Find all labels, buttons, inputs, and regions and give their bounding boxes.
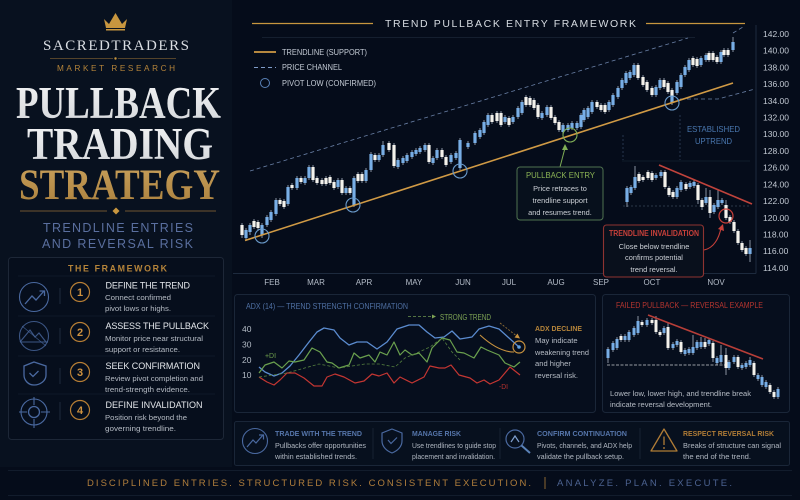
icon: trend circle (242, 428, 268, 454)
title: PULLBACK (16, 78, 221, 128)
price axis labels: 128.00 (763, 146, 789, 156)
ADX decline note: reversal risk. (535, 371, 578, 380)
month axis labels: MAY (406, 278, 423, 287)
ADX decline marker (480, 323, 525, 353)
ADX decline note: and higher (535, 359, 571, 368)
failed pullback heading: FAILED PULLBACK — REVERSAL EXAMPLE (616, 301, 763, 310)
legend: PIVOT LOW (CONFIRMED) (282, 79, 376, 88)
price axis labels: 132.00 (763, 112, 789, 122)
framework heading: THE FRAMEWORK (68, 264, 168, 274)
pivot markers (255, 96, 679, 243)
takeaway: manage risk: MANAGE RISK (412, 429, 461, 438)
ADX decline note (534, 324, 589, 380)
takeaway: respect reversal risk: the end of the trend. (683, 452, 751, 461)
chart title: TREND PULLBACK ENTRY FRAMEWORK (385, 18, 636, 30)
callout: trendline invalidation: Close below trendline (619, 242, 689, 251)
price axis labels: 138.00 (763, 62, 789, 72)
month axis labels: AUG (547, 278, 565, 287)
icon: pullback mountain (20, 322, 48, 350)
takeaway: manage risk: placement and invalidation. (412, 452, 495, 461)
month axis labels: FEB (264, 278, 280, 287)
step 4 (70, 400, 202, 433)
price axis labels (763, 29, 789, 273)
price axis labels: 118.00 (763, 230, 789, 240)
strong trend label: STRONG TREND (440, 313, 491, 322)
price axis labels: 130.00 (763, 129, 789, 139)
panel: main chart (233, 18, 789, 287)
callout: pullback entry: and resumes trend. (528, 208, 592, 217)
ADX decline note: weakening trend (534, 348, 589, 357)
brand header (43, 13, 189, 73)
footer banner: DISCIPLINED ENTRIES. STRUCTURED RISK. CONSISTENT EXECUTION. (87, 478, 531, 489)
step 1: pivot lows or highs. (105, 304, 171, 313)
panel: failed pullback (602, 294, 790, 412)
icon: crown (104, 13, 127, 30)
step 4: governing trendline. (105, 424, 176, 433)
step 2: ASSESS THE PULLBACK (106, 321, 209, 331)
takeaway: confirm continuation (506, 429, 632, 461)
subtitle (42, 221, 194, 251)
callout: trendline invalidation: TRENDLINE INVALIDATION (609, 229, 699, 238)
takeaway: respect reversal risk: Breaks of structure can signal (683, 441, 781, 450)
icon: trend up (20, 282, 48, 312)
strong trend label (408, 313, 491, 322)
legend: PRICE CHANNEL (282, 63, 343, 72)
icon: target (19, 397, 50, 428)
failed pullback note: indicate reversal development. (610, 400, 712, 409)
label: established uptrend: UPTREND (695, 136, 732, 146)
step 3: 3 (77, 367, 83, 379)
candlesticks: breakdown inset (627, 166, 750, 262)
support dashed line (607, 364, 725, 366)
price axis labels: 114.00 (763, 263, 789, 273)
month axis labels: JUL (502, 278, 517, 287)
takeaway: trade with the trend: Pullbacks offer opportunities (275, 441, 366, 450)
ADX line (259, 325, 519, 376)
panel: takeaways (234, 422, 790, 466)
step 1: DEFINE THE TREND (106, 280, 190, 290)
step 2: Monitor price near structural (105, 334, 203, 343)
ADX scale: 20 (242, 355, 252, 365)
step 3: SEEK CONFIRMATION (106, 361, 200, 371)
takeaway: manage risk (382, 429, 496, 461)
step 3 (70, 361, 203, 394)
label: +DI: +DI (265, 351, 276, 360)
ADX scale (242, 324, 252, 380)
callout: pullback entry: trendline support (532, 196, 588, 205)
price axis labels: 134.00 (763, 96, 789, 106)
panel: the framework (8, 258, 224, 440)
trendline (245, 83, 733, 240)
dashed signal line (259, 338, 460, 377)
step 4: 4 (77, 405, 84, 417)
title: STRATEGY (19, 162, 220, 209)
brand subtitle: MARKET RESEARCH (57, 64, 175, 73)
takeaway: confirm continuation: validate the pullback setup. (537, 452, 624, 461)
month axis labels: OCT (644, 278, 661, 287)
ADX scale: 10 (242, 370, 252, 380)
title: TRADING (27, 119, 213, 169)
icon: shield (24, 362, 46, 385)
month axis labels (264, 278, 725, 287)
takeaway: confirm continuation: Pivots, channels, and ADX help (537, 441, 632, 450)
month axis labels: JUN (455, 278, 471, 287)
label: established uptrend (687, 124, 740, 146)
subtitle: AND REVERSAL RISK (42, 237, 194, 251)
ADX heading: ADX (14) — TREND STRENGTH CONFIRMATION (246, 302, 408, 311)
takeaway: respect reversal risk: RESPECT REVERSAL RISK (683, 429, 774, 438)
footer banner: ANALYZE. PLAN. EXECUTE. (557, 478, 732, 489)
legend (254, 48, 376, 88)
month axis labels: NOV (707, 278, 725, 287)
callout: pullback entry (517, 144, 603, 220)
panel: ADX chart (234, 294, 596, 412)
red trendline (659, 165, 752, 204)
ADX scale: 40 (242, 324, 252, 334)
step 1: Connect confirmed (105, 293, 171, 302)
callout: trendline invalidation (604, 224, 724, 277)
failed pullback note (610, 389, 751, 409)
price axis labels: 116.00 (763, 246, 789, 256)
price axis labels: 124.00 (763, 179, 789, 189)
title (16, 78, 221, 209)
month axis labels: MAR (307, 278, 325, 287)
month axis labels: APR (356, 278, 372, 287)
step 4: Position risk beyond the (105, 413, 187, 422)
footer banner (8, 470, 792, 496)
price axis labels: 122.00 (763, 196, 789, 206)
takeaway: manage risk: Use trendlines to guide stop (412, 441, 496, 450)
brand name: SACREDTRADERS (43, 38, 189, 54)
callout: trendline invalidation: trend reversal. (630, 265, 678, 274)
candlesticks: uptrend (242, 37, 733, 241)
step 1 (70, 280, 190, 313)
step 3: Review pivot completion and (105, 374, 203, 383)
takeaway: trade with the trend (242, 428, 366, 461)
takeaway: trade with the trend: within established trends. (274, 452, 357, 461)
step 1: 1 (77, 287, 83, 299)
price axis labels: 140.00 (763, 46, 789, 56)
marker: invalidation (719, 209, 733, 223)
step 2: 2 (77, 327, 83, 339)
price axis labels: 136.00 (763, 79, 789, 89)
ADX decline note: ADX DECLINE (535, 324, 582, 333)
takeaway: respect reversal risk (651, 429, 781, 461)
step 4: DEFINE INVALIDATION (106, 400, 202, 410)
icon: warning triangle (651, 429, 677, 451)
step 3: trend-strength evidence. (105, 385, 190, 394)
icon: shield check (382, 429, 402, 453)
step 2: support or resistance. (105, 345, 180, 354)
takeaway: trade with the trend: TRADE WITH THE TREND (275, 429, 362, 438)
label: established uptrend: ESTABLISHED (687, 124, 740, 134)
failed pullback note: Lower low, lower high, and trendline break (610, 389, 751, 398)
icon: magnifier (506, 430, 530, 453)
legend: TRENDLINE (SUPPORT) (282, 48, 367, 57)
step 2 (70, 321, 209, 354)
red falling trendline (648, 315, 763, 359)
label: -DI: -DI (499, 382, 508, 391)
price channel (250, 27, 755, 171)
callout: pullback entry: Price retraces to (533, 184, 587, 193)
takeaway: confirm continuation: CONFIRM CONTINUATION (537, 429, 627, 438)
ADX scale: 30 (242, 340, 252, 350)
candlesticks: reversal (608, 316, 778, 399)
+DI line (259, 338, 520, 373)
price axis labels: 142.00 (763, 29, 789, 39)
price axis labels: 126.00 (763, 163, 789, 173)
callout: pullback entry: PULLBACK ENTRY (526, 171, 596, 180)
price axis labels: 120.00 (763, 213, 789, 223)
month axis labels: SEP (593, 278, 609, 287)
-DI line (259, 365, 520, 386)
subtitle: TRENDLINE ENTRIES (43, 221, 193, 235)
callout: trendline invalidation: confirms potential (625, 253, 683, 262)
ADX decline note: May indicate (535, 336, 578, 345)
